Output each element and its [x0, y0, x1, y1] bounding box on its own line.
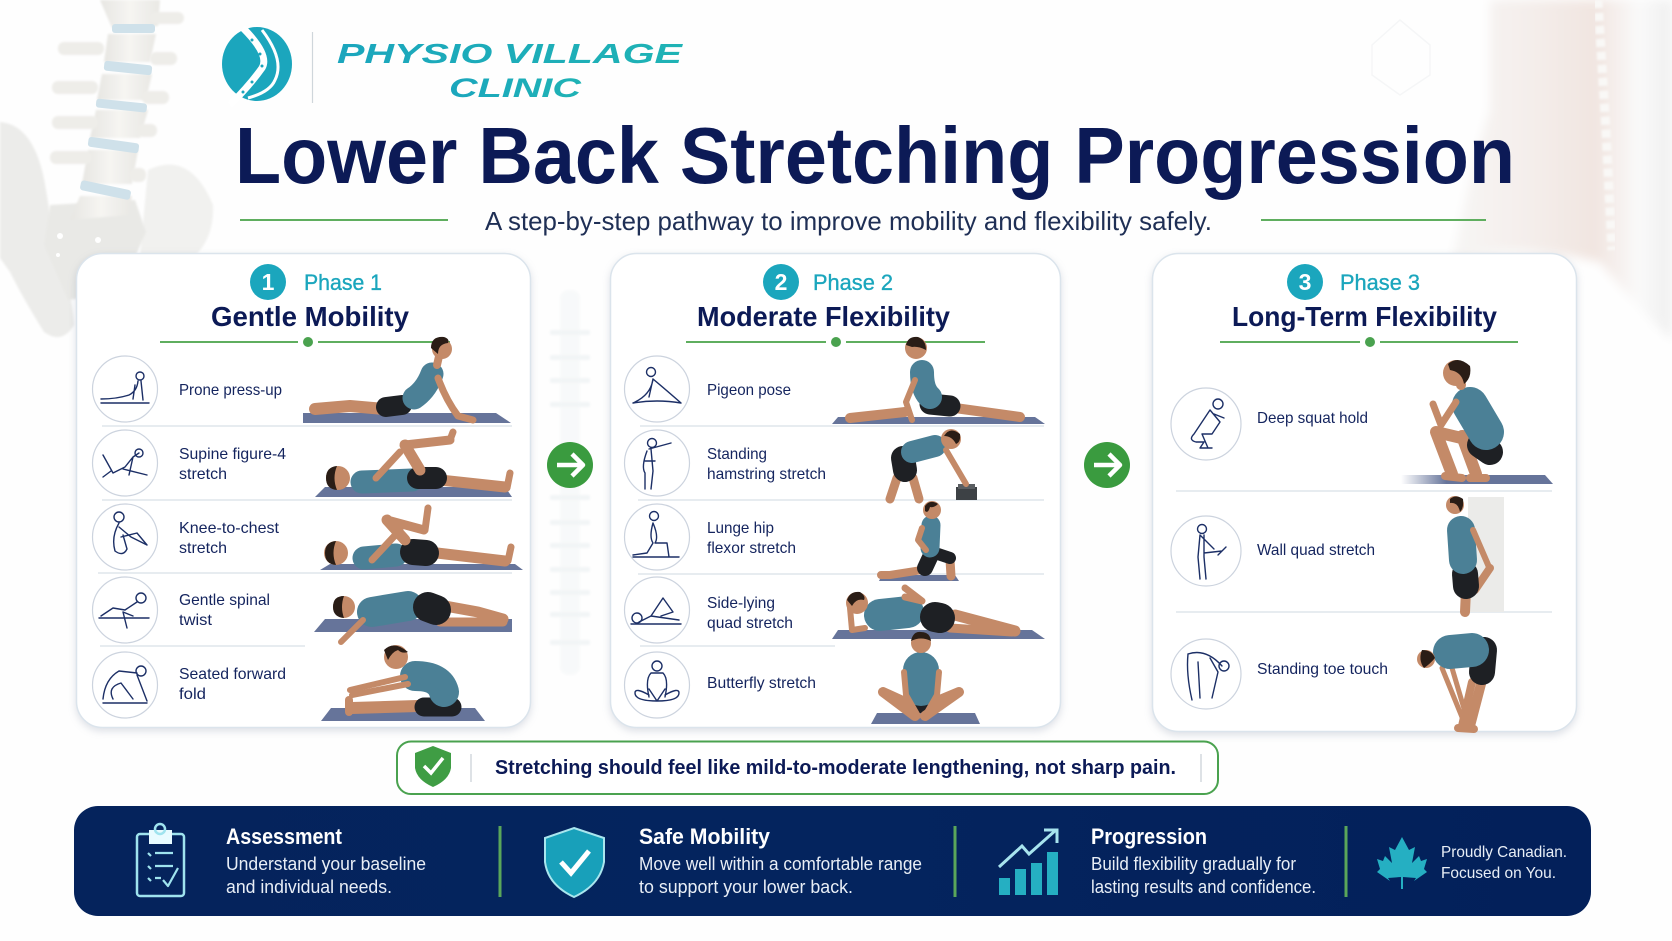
label: standing hamstring stretch: hamstring stretch [707, 466, 826, 483]
label: standing toe touch: Standing toe touch [1257, 661, 1388, 678]
callout text: Stretching should feel like mild-to-moderate lengthening, not sharp pain. [495, 757, 1176, 779]
photo: deep squat hold [1401, 360, 1553, 484]
label: wall quad stretch: Wall quad stretch [1257, 542, 1375, 559]
phase 2 badge: 2 [775, 269, 787, 295]
icon: progression chart [999, 830, 1058, 895]
label: standing hamstring stretch [707, 446, 826, 483]
label: side-lying quad stretch [707, 595, 793, 632]
phase 2 heading: Moderate Flexibility [697, 301, 950, 332]
label: seated forward fold: Seated forward [179, 666, 286, 683]
label: lunge hip flexor stretch [707, 520, 796, 557]
photo: standing hamstring stretch [890, 429, 977, 500]
label: side-lying quad stretch: quad stretch [707, 615, 793, 632]
icon: standing toe touch [1171, 639, 1241, 709]
photo: pigeon pose [832, 337, 1045, 424]
safe mobility text: Move well within a comfortable range [639, 854, 922, 874]
phase 3 heading: Long-Term Flexibility [1232, 301, 1497, 332]
title: Lower Back Stretching Progression [235, 111, 1515, 200]
photo: seated forward fold [321, 645, 485, 721]
label: supine figure-4 stretch [179, 446, 286, 483]
label: lunge hip flexor stretch: flexor stretch [707, 540, 796, 557]
icon: butterfly stretch [624, 652, 690, 718]
safe mobility text: to support your lower back. [639, 877, 853, 897]
label: lunge hip flexor stretch: Lunge hip [707, 520, 774, 537]
progression text [1091, 824, 1316, 897]
label: gentle spinal twist: Gentle spinal [179, 592, 270, 609]
label: knee-to-chest stretch [179, 520, 280, 557]
photo: standing toe touch [1417, 650, 1484, 729]
icon: green shield check [415, 746, 451, 787]
tagline [1441, 844, 1567, 882]
icon: side-lying quad stretch [624, 577, 690, 643]
phase 2 label: Phase 2 [813, 270, 893, 295]
background: faint anatomy torso [1372, 0, 1672, 340]
logo icon [222, 27, 292, 105]
label: butterfly stretch: Butterfly stretch [707, 675, 816, 692]
icon: assessment clipboard [137, 824, 184, 896]
label: knee-to-chest stretch: stretch [179, 540, 227, 557]
label: pigeon pose: Pigeon pose [707, 382, 791, 399]
logo wordmark: CLINIC [449, 73, 582, 103]
tagline: Focused on You. [1441, 865, 1556, 882]
icon: knee-to-chest [92, 504, 158, 570]
phase 3 badge: 3 [1299, 269, 1311, 295]
photo: gentle spinal twist [314, 596, 512, 642]
photo: prone press-up [303, 337, 511, 423]
icon: prone press-up [92, 356, 158, 422]
phase 1 badge [250, 264, 286, 300]
label: seated forward fold: fold [179, 686, 206, 703]
safe mobility text [639, 824, 922, 897]
phase 1 heading: Gentle Mobility [211, 301, 409, 332]
photo: side-lying quad stretch [832, 588, 1045, 639]
assessment text: and individual needs. [226, 877, 392, 897]
photo: wall quad stretch [1446, 496, 1504, 612]
progression text: lasting results and confidence. [1091, 877, 1316, 897]
progression text: Build flexibility gradually for [1091, 854, 1296, 874]
progression text: Progression [1091, 824, 1207, 849]
tagline: Proudly Canadian. [1441, 844, 1567, 861]
faint spine between phases [550, 290, 590, 675]
label: seated forward fold [179, 666, 286, 703]
subtitle: A step-by-step pathway to improve mobility and flexibility safely. [485, 206, 1212, 236]
icon: deep squat hold [1171, 388, 1241, 460]
phase 3 badge [1287, 264, 1323, 300]
arrow: phase 1 to phase 2 [547, 442, 593, 488]
photo: supine figure-4 stretch [315, 432, 512, 497]
label: knee-to-chest stretch: Knee-to-chest [179, 520, 280, 537]
photo: butterfly stretch [871, 632, 980, 724]
label: supine figure-4 stretch: stretch [179, 466, 227, 483]
logo: Physio Village Clinic [222, 27, 684, 105]
phase 1 label: Phase 1 [304, 270, 382, 295]
phase 2 badge [763, 264, 799, 300]
icon: pigeon pose [624, 356, 690, 422]
icon: lunge hip flexor stretch [624, 504, 690, 570]
icon: safe mobility shield [545, 828, 604, 897]
safe mobility text: Safe Mobility [639, 824, 771, 849]
phase 1 badge: 1 [262, 269, 275, 295]
logo wordmark [337, 38, 684, 103]
icon: maple leaf [1377, 837, 1427, 889]
assessment text: Understand your baseline [226, 854, 426, 874]
icon: seated forward fold [92, 652, 158, 718]
label: standing hamstring stretch: Standing [707, 446, 767, 463]
icon: standing hamstring stretch [624, 430, 690, 496]
label: gentle spinal twist [179, 592, 270, 629]
photo: knee-to-chest stretch [320, 508, 523, 570]
icon: wall quad stretch [1171, 516, 1241, 586]
label: prone press-up: Prone press-up [179, 382, 282, 399]
icon: supine figure-4 [92, 430, 158, 496]
panel: phase 1 gentle mobility [76, 254, 530, 728]
background: spine and pelvis illustration [0, 0, 213, 337]
assessment text [226, 824, 426, 897]
photo: lunge hip flexor stretch [879, 501, 959, 581]
panel: phase 2 moderate flexibility [610, 254, 1060, 728]
logo wordmark: PHYSIO VILLAGE [337, 38, 684, 69]
icon: gentle spinal twist [92, 577, 158, 643]
arrow: phase 2 to phase 3 [1084, 442, 1130, 488]
label: deep squat hold: Deep squat hold [1257, 410, 1368, 427]
footer banner [74, 806, 1591, 916]
logo divider [312, 32, 314, 103]
callout: safety note [397, 742, 1218, 794]
assessment text: Assessment [226, 824, 343, 849]
label: side-lying quad stretch: Side-lying [707, 595, 775, 612]
phase 3 label: Phase 3 [1340, 270, 1420, 295]
label: supine figure-4 stretch: Supine figure-4 [179, 446, 286, 463]
label: gentle spinal twist: twist [179, 612, 213, 629]
panel: phase 3 long-term flexibility [1152, 254, 1576, 732]
